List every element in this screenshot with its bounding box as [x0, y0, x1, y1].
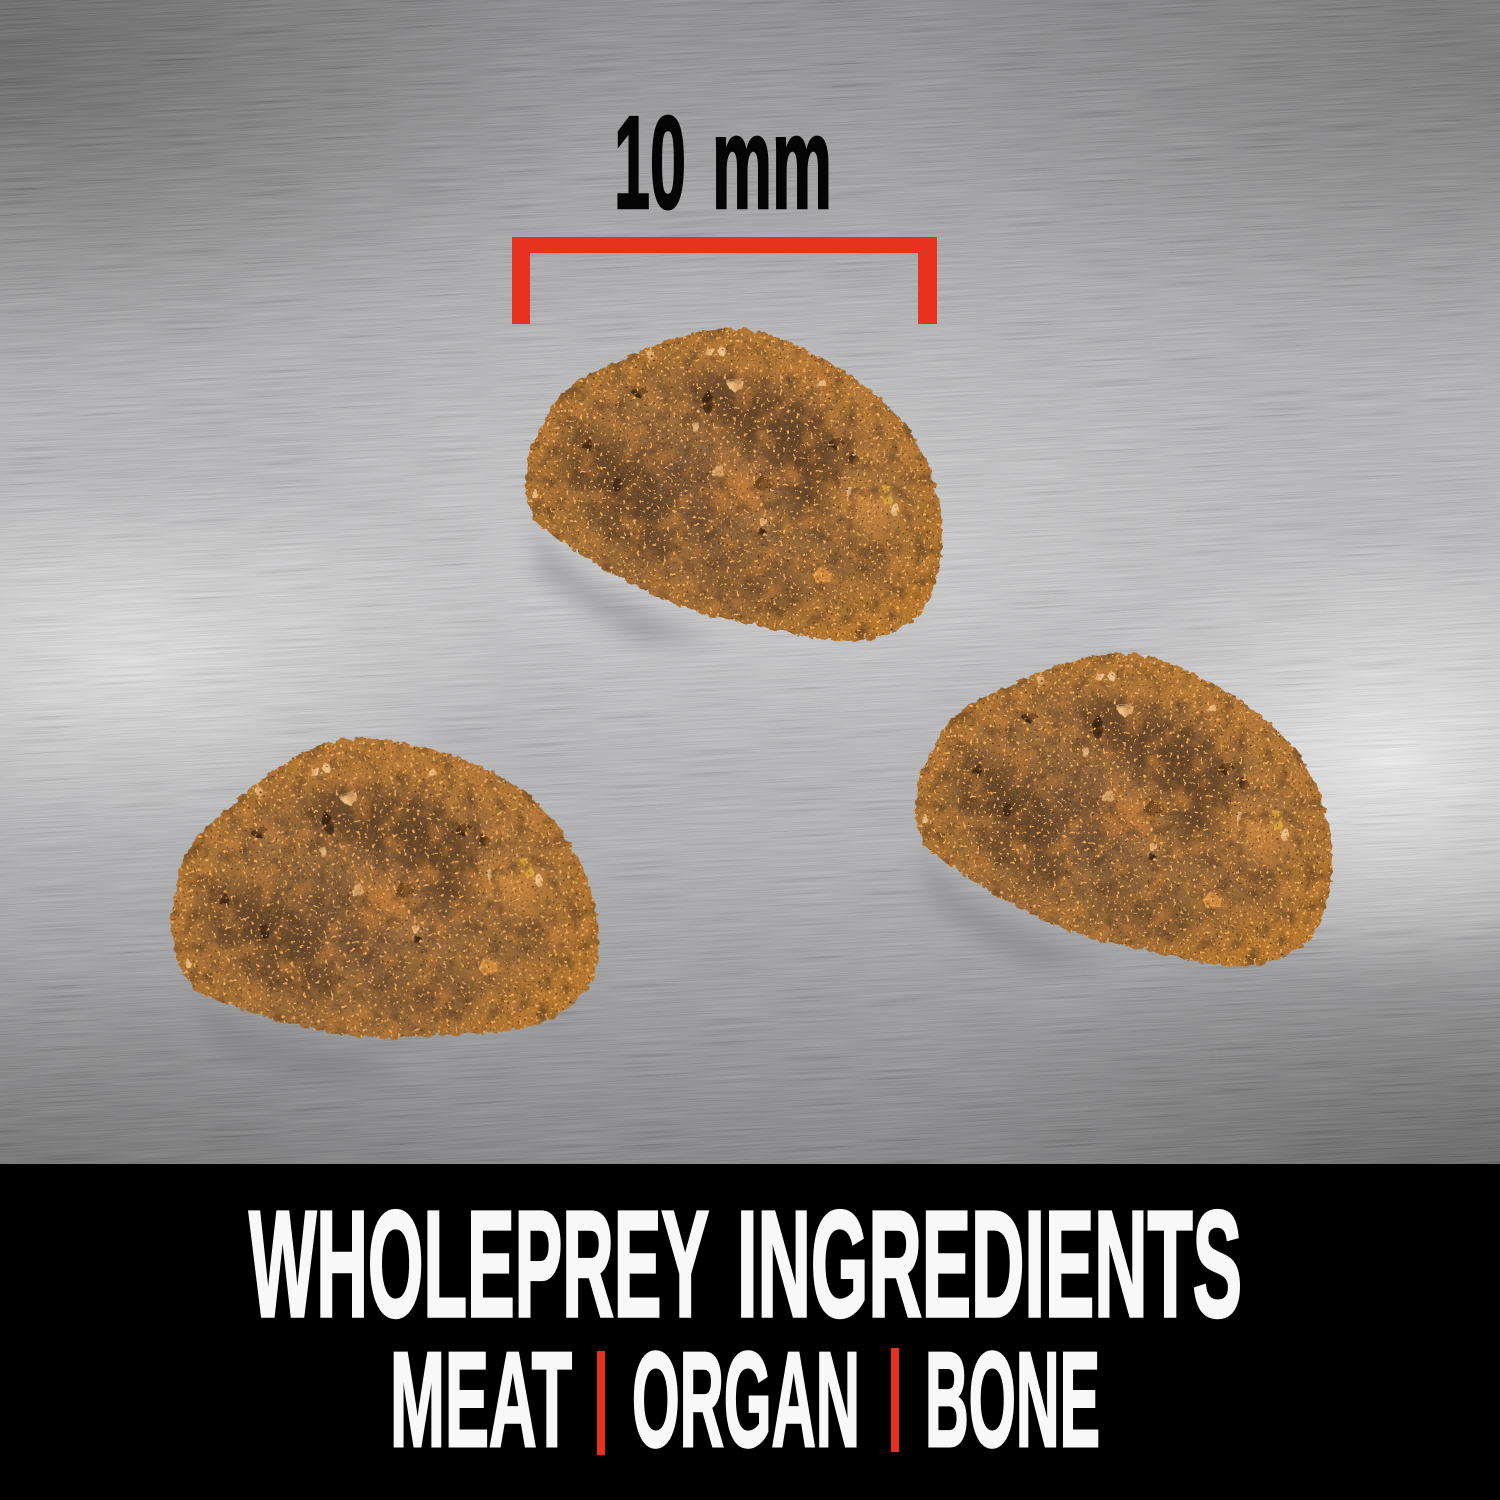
kibble: top centre [525, 329, 942, 645]
size label: 10 mm [614, 89, 832, 236]
subheading: meat, organ, bone: MEAT [390, 1324, 572, 1475]
size label: 10 mm: mm [712, 89, 832, 236]
panel: black caption band [0, 1164, 1500, 1500]
subheading: meat, organ, bone: ORGAN [632, 1324, 860, 1475]
red measurement bracket [512, 237, 937, 324]
kibble: left [131, 685, 624, 1119]
heading: WholePrey Ingredients: WHOLEPREY [249, 1179, 709, 1348]
size label: 10 mm: 10 [614, 89, 686, 236]
subheading: meat, organ, bone [390, 1324, 1100, 1475]
panel: black caption band: BONE [925, 1324, 1100, 1475]
kibble: right [915, 654, 1332, 970]
